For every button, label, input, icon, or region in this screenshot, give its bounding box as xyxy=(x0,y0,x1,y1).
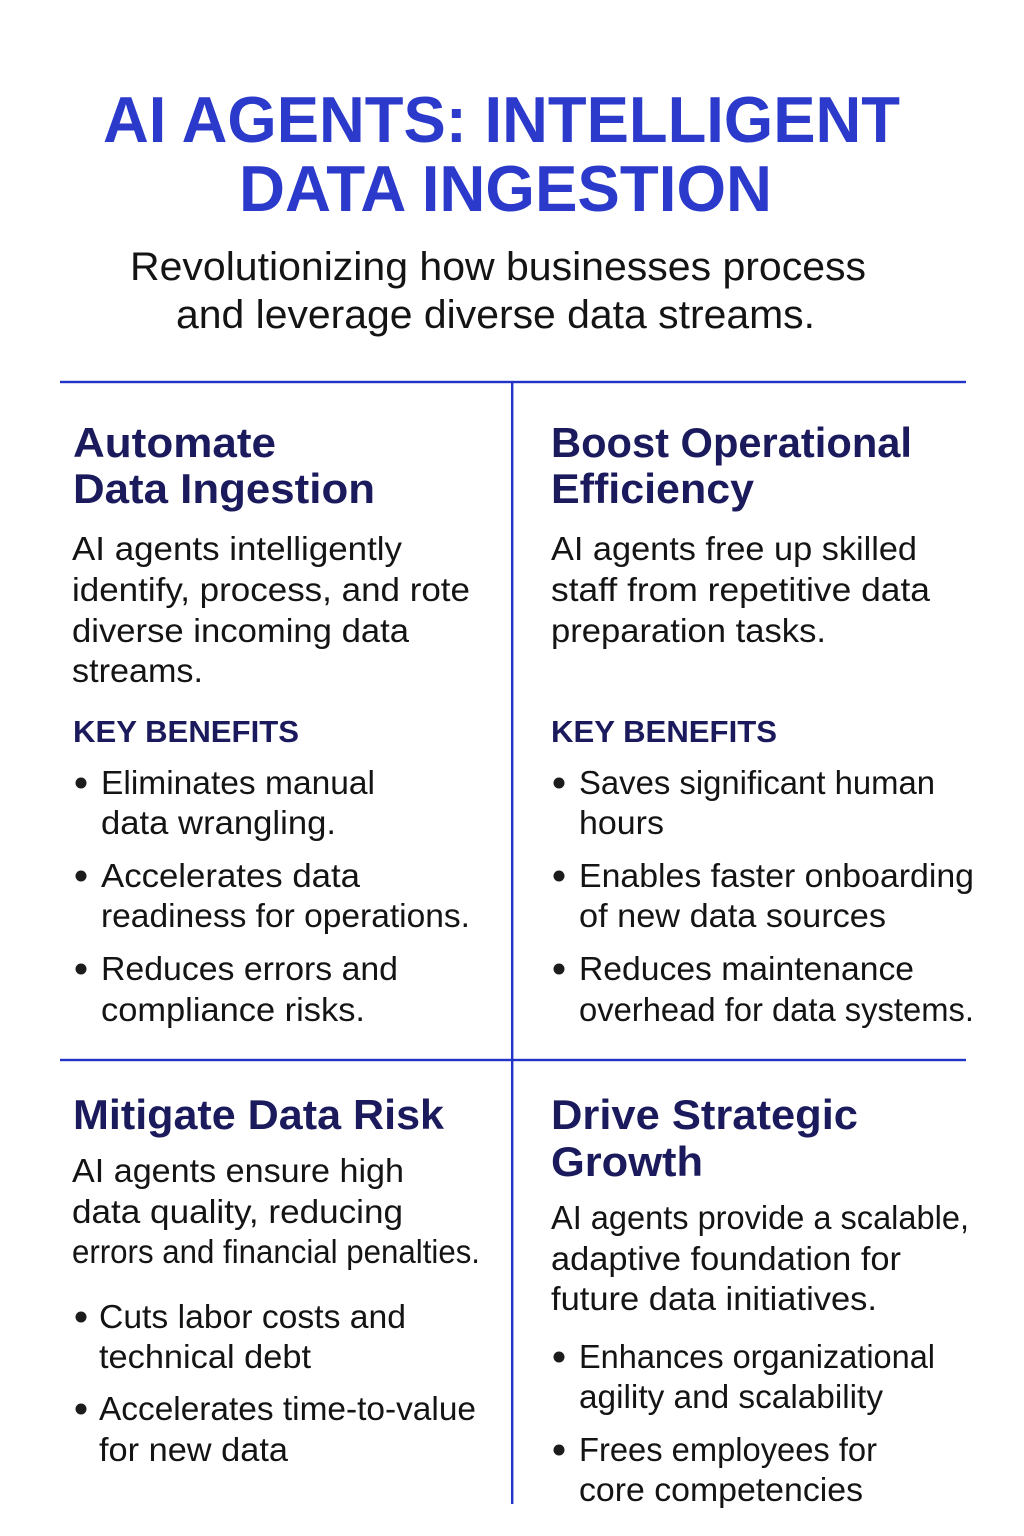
title: AI AGENTS: INTELLIGENT xyxy=(103,83,900,156)
benefit list: Frees employees for xyxy=(579,1431,877,1468)
benefit list: for new data xyxy=(99,1431,289,1468)
benefit list: Enhances organizational xyxy=(579,1338,935,1375)
benefit list: Cuts labor costs and xyxy=(99,1298,406,1335)
heading: automate data ingestion: Data Ingestion xyxy=(73,465,375,512)
key benefits label: KEY BENEFITS xyxy=(73,714,299,749)
benefit list: Accelerates time-to-value xyxy=(99,1390,476,1427)
description: automate: streams. xyxy=(72,652,203,689)
description: mitigate xyxy=(72,1152,480,1270)
benefit list: agility and scalability xyxy=(579,1378,883,1415)
benefit list xyxy=(554,1338,935,1508)
description: automate xyxy=(72,530,470,689)
description: mitigate: data quality, reducing xyxy=(72,1193,403,1230)
description: automate: diverse incoming data xyxy=(72,612,410,649)
description: automate: identify, process, and rote xyxy=(72,571,470,608)
description: drive: adaptive foundation for xyxy=(551,1240,901,1277)
description: drive: AI agents provide a scalable, xyxy=(551,1199,969,1236)
benefit list xyxy=(76,764,470,1028)
panel: mitigate data risk xyxy=(72,1091,480,1468)
title: DATA INGESTION xyxy=(239,152,772,225)
benefit list: data wrangling. xyxy=(101,804,336,841)
benefit list xyxy=(554,764,974,1028)
benefit list: hours xyxy=(579,804,664,841)
benefit list: technical debt xyxy=(99,1338,311,1375)
description: boost: preparation tasks. xyxy=(551,612,826,649)
description: mitigate: errors and financial penalties. xyxy=(72,1233,480,1270)
heading: automate data ingestion: Automate xyxy=(73,419,276,466)
description: boost: AI agents free up skilled xyxy=(551,530,917,567)
benefit list: Saves significant human xyxy=(579,764,935,801)
description: boost xyxy=(551,530,931,649)
heading: drive strategic growth: Drive Strategic xyxy=(551,1091,858,1138)
subtitle xyxy=(130,245,866,337)
title xyxy=(103,83,900,225)
panel: drive strategic growth xyxy=(551,1091,969,1508)
subtitle: Revolutionizing how businesses process xyxy=(130,245,866,289)
description: boost: staff from repetitive data xyxy=(551,571,931,608)
description: drive: future data initiatives. xyxy=(551,1280,877,1317)
benefit list: Enables faster onboarding xyxy=(579,857,974,894)
panel: automate data ingestion xyxy=(72,419,470,1028)
benefit list: Reduces maintenance xyxy=(579,950,914,987)
heading: boost operational efficiency: Boost Operational xyxy=(551,419,912,466)
description: drive xyxy=(551,1199,969,1317)
benefit list: core competencies xyxy=(579,1471,863,1508)
benefit list xyxy=(76,1298,476,1468)
benefit list: Reduces errors and xyxy=(101,950,398,987)
benefit list: readiness for operations. xyxy=(101,897,470,934)
benefit list: Accelerates data xyxy=(101,857,361,894)
heading: drive strategic growth xyxy=(551,1091,858,1185)
description: mitigate: AI agents ensure high xyxy=(72,1152,404,1189)
heading: boost operational efficiency xyxy=(551,419,912,512)
description: automate: AI agents intelligently xyxy=(72,530,403,567)
benefit list: overhead for data systems. xyxy=(579,991,974,1028)
heading: drive strategic growth: Growth xyxy=(551,1138,703,1185)
benefit list: Eliminates manual xyxy=(101,764,375,801)
subtitle: and leverage diverse data streams. xyxy=(176,293,815,337)
heading: automate data ingestion xyxy=(73,419,375,512)
panel: boost operational efficiency xyxy=(551,419,974,1028)
heading: boost operational efficiency: Efficiency xyxy=(551,465,755,512)
key benefits label: KEY BENEFITS xyxy=(551,714,777,749)
heading: mitigate data risk: Mitigate Data Risk xyxy=(73,1091,445,1138)
benefit list: compliance risks. xyxy=(101,991,365,1028)
benefit list: of new data sources xyxy=(579,897,886,934)
